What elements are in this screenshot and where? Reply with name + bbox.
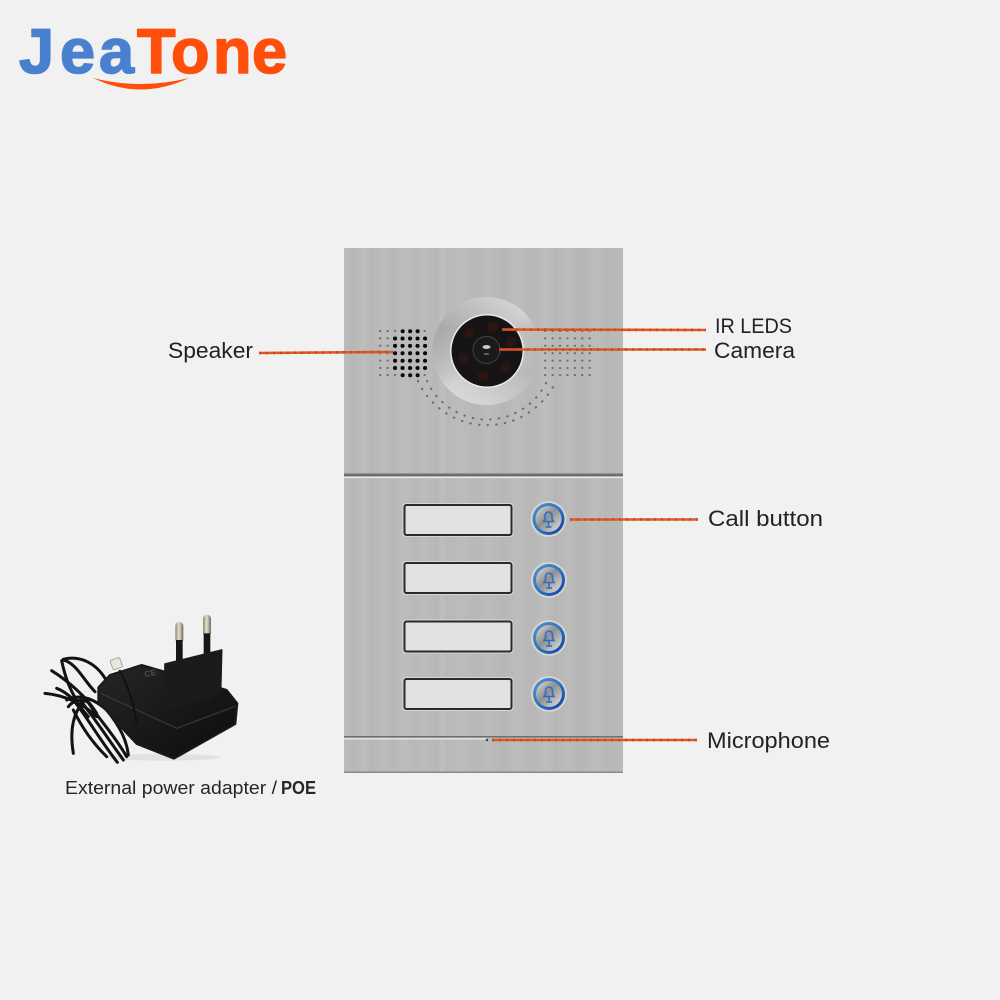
lens glass — [452, 316, 522, 386]
logo: JeaTone: Tone — [137, 17, 287, 87]
speaker grille: left small perforations — [380, 331, 428, 375]
camera lens bezel — [432, 297, 540, 405]
logo: JeaTone — [19, 17, 287, 90]
caption: POE — [281, 778, 316, 798]
panel divider — [344, 474, 623, 476]
label: Camera: Camera — [714, 338, 796, 363]
call button 2 — [531, 562, 567, 598]
label: Speaker: Speaker — [168, 338, 253, 363]
call button 4 — [531, 676, 567, 712]
leader: microphone — [492, 739, 697, 741]
thin cable with connector — [110, 657, 137, 723]
arc perforations — [418, 381, 556, 425]
logo smile — [93, 78, 189, 90]
IR LEDs — [458, 322, 516, 381]
adapter CE mark: CE — [143, 667, 157, 679]
adapter body — [98, 665, 237, 759]
label: Call button: Call button — [708, 506, 823, 531]
power adapter photo — [45, 615, 237, 762]
leader: camera — [499, 348, 706, 351]
microphone strip line — [344, 736, 623, 773]
caption: External power adapter / — [65, 778, 277, 798]
name slot 3 — [403, 620, 513, 653]
panel: upper camera section — [344, 248, 623, 475]
name slot 2 — [403, 562, 513, 594]
lens centre — [473, 336, 500, 364]
door station panel — [344, 248, 623, 773]
label: IR LEDS: IR LEDS — [715, 315, 792, 338]
leader: IR LEDs — [502, 328, 706, 331]
microphone hole — [486, 739, 488, 741]
call button 3 — [531, 620, 567, 656]
logo: JeaTone: Jea — [19, 17, 135, 87]
adapter body seam — [101, 693, 236, 728]
adapter shadow — [107, 754, 220, 761]
plug housing — [165, 650, 222, 709]
right perforations — [545, 331, 593, 375]
name slot 4 — [403, 678, 513, 710]
label: Microphone: Microphone — [707, 728, 830, 753]
name slot 1 — [403, 504, 513, 536]
speaker grille: black holes — [395, 331, 426, 375]
panel: lower button section — [344, 478, 623, 773]
leader: speaker — [259, 352, 393, 353]
leader: call button — [570, 518, 698, 521]
cable bundle — [45, 658, 128, 762]
plug pins — [175, 615, 211, 667]
call button 1 — [530, 501, 566, 537]
callout lines — [259, 330, 706, 740]
